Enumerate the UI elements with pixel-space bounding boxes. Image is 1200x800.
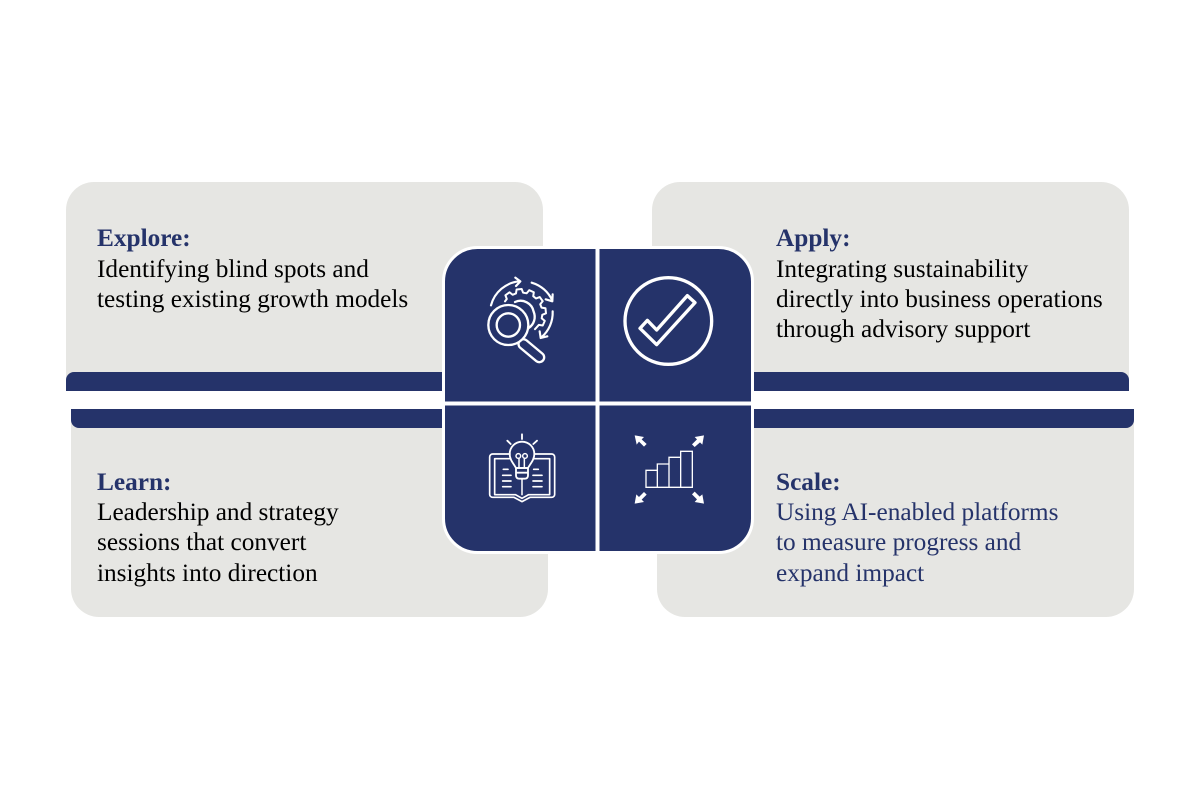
apply description <box>776 255 1103 343</box>
panel: scale <box>657 409 1134 617</box>
explore description: Identifying blind spots and <box>97 255 369 283</box>
panel: apply <box>652 182 1129 391</box>
explore description: testing existing growth models <box>97 285 408 313</box>
learn heading: Learn: <box>97 468 171 496</box>
learn description <box>97 498 339 587</box>
apply description: through advisory support <box>776 315 1030 343</box>
explore divider bar <box>66 372 543 391</box>
scale description: Using AI-enabled platforms <box>776 498 1058 526</box>
central icon block <box>444 248 752 552</box>
apply description: directly into business operations <box>776 285 1103 313</box>
icon: magnifier, gear and cycle arrows <box>488 278 553 357</box>
scale description <box>776 498 1058 587</box>
panel: explore <box>66 182 543 391</box>
scale description: to measure progress and <box>776 528 1022 556</box>
panel: learn <box>71 409 548 617</box>
icon: open book with light bulb <box>490 434 555 502</box>
scale heading: Scale: <box>776 468 841 496</box>
learn description: insights into direction <box>97 559 318 587</box>
icon: growing bar chart with expansion arrows <box>635 435 704 504</box>
apply heading: Apply: <box>776 224 851 252</box>
explore heading: Explore: <box>97 224 191 252</box>
apply description: Integrating sustainability <box>776 255 1029 283</box>
scale description: expand impact <box>776 559 924 587</box>
learn divider bar <box>71 409 548 428</box>
learn description: Leadership and strategy <box>97 498 339 526</box>
learn description: sessions that convert <box>97 528 306 556</box>
icon: check mark in circle <box>625 278 712 364</box>
scale divider bar <box>657 409 1134 428</box>
apply divider bar <box>652 372 1129 391</box>
explore description <box>97 255 408 313</box>
